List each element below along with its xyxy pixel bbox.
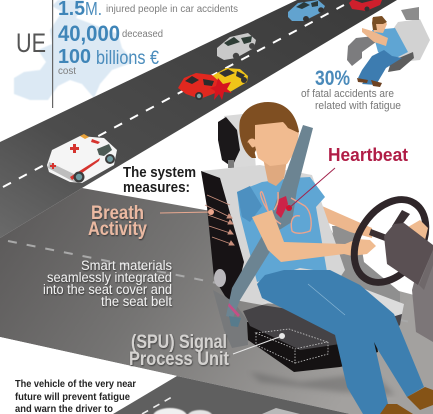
heading: breath activity — [88, 203, 147, 240]
lungs and airway — [260, 192, 311, 233]
car: red — [178, 73, 222, 100]
floor dashed line — [8, 241, 430, 326]
text: smart materials: Smart materials — [81, 258, 172, 273]
text: the vehicle of the near future — [15, 378, 136, 414]
far arm — [312, 200, 372, 238]
measuring arrows — [205, 195, 234, 245]
stat: 30%: 30% — [315, 67, 350, 90]
car: silver — [217, 33, 256, 60]
heading: breath activity: Breath — [91, 203, 144, 224]
stat: injured: injured people in car accidents — [106, 4, 238, 15]
stat: deceased: 40,000 — [58, 21, 120, 46]
seat base black — [247, 322, 380, 372]
seat shadow — [250, 372, 395, 395]
SPU dashed box — [256, 329, 328, 363]
heading: signal process unit — [129, 332, 230, 370]
seat side grey — [213, 290, 248, 348]
headrest — [224, 113, 256, 171]
car: red far — [349, 0, 382, 12]
trousers — [257, 270, 424, 414]
stat: cost: billions € — [96, 48, 159, 69]
car: blue — [288, 0, 325, 22]
stat: injured — [58, 0, 238, 20]
stat: deceased: deceased — [122, 29, 163, 40]
SPU pointer — [233, 333, 285, 354]
europe map — [14, 0, 134, 100]
seat belt — [226, 125, 313, 318]
road — [0, 0, 397, 238]
heading: the system measures: measures: — [123, 180, 190, 196]
stat: cost — [58, 46, 159, 77]
far hand — [408, 220, 428, 240]
text: the vehicle of the near future: The vehicle of the very near — [15, 378, 136, 390]
dash background — [332, 226, 400, 304]
heart icon — [276, 168, 335, 218]
seat side black — [201, 171, 244, 304]
headrest black — [218, 117, 240, 167]
seat cushion light — [262, 277, 404, 325]
lower road — [113, 376, 350, 414]
steering column far panel — [412, 245, 433, 342]
text: fatal accidents — [301, 88, 401, 112]
near arm — [252, 210, 376, 262]
icon: tired driver in seat — [347, 7, 430, 87]
seat back — [201, 165, 345, 305]
cars on lower road — [153, 408, 300, 414]
shirt — [237, 177, 327, 282]
text: smart materials — [43, 258, 172, 309]
seat side button — [214, 269, 226, 287]
head — [239, 102, 299, 166]
heading: the system measures: The system — [123, 165, 196, 181]
floor — [0, 188, 433, 414]
shoes — [380, 387, 433, 414]
divider line — [52, 0, 53, 108]
belt clip — [228, 303, 240, 317]
buckle — [229, 316, 241, 327]
text: smart materials: into the seat cover and — [43, 282, 172, 297]
car: ambulance — [47, 134, 117, 183]
seat cushion dark — [243, 305, 340, 350]
heading: signal process unit: (SPU) Signal — [131, 332, 227, 353]
heading: signal process unit: Process Unit — [129, 349, 230, 370]
seat right base — [365, 314, 402, 345]
driver and car seat illustration — [201, 102, 433, 414]
text: fatal accidents: of fatal accidents are — [301, 88, 394, 100]
stat: cost: 100 — [58, 46, 91, 68]
stat: cost: cost — [58, 66, 76, 77]
steering column — [384, 223, 433, 285]
label UE: UE — [16, 28, 46, 58]
text: smart materials: seamlessly integrated — [47, 270, 172, 285]
neck — [263, 158, 287, 186]
text: fatal accidents: related with fatigue — [315, 100, 401, 112]
heading: heartbeat: Heartbeat — [328, 145, 408, 165]
steering wheel — [339, 186, 433, 296]
car: yellow — [212, 68, 248, 92]
red impact splash — [210, 78, 232, 100]
heading: the system measures — [123, 165, 196, 196]
breath pointer — [160, 209, 214, 215]
heading: breath activity: Activity — [88, 219, 147, 240]
lower left white panel — [0, 337, 177, 414]
stat: deceased — [58, 21, 163, 46]
text: the vehicle of the near future: future will prevent fatigue — [15, 391, 130, 403]
text: smart materials: the seat belt — [101, 294, 172, 309]
